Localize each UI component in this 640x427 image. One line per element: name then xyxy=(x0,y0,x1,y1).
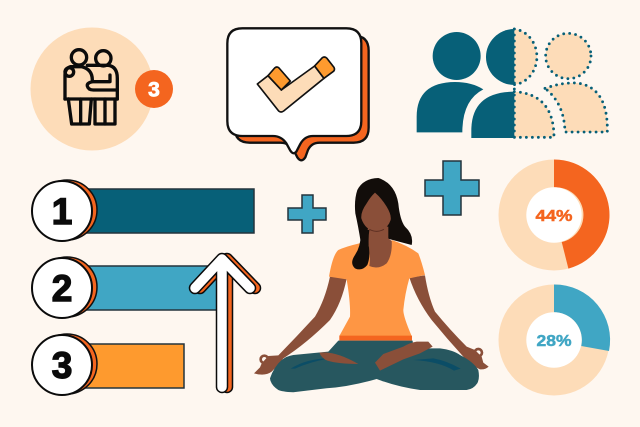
figure: woman meditating xyxy=(254,178,489,392)
neck and chest xyxy=(363,227,393,270)
hair front strand xyxy=(352,230,369,269)
shirt hem xyxy=(339,336,412,341)
badge: number 3 xyxy=(135,70,173,108)
chart: donut 28% xyxy=(498,284,610,396)
foot left xyxy=(319,352,358,364)
arm left xyxy=(254,277,347,375)
jaw shadow xyxy=(369,229,384,231)
icon: large plus xyxy=(425,161,479,215)
face xyxy=(361,193,391,232)
icon: checkmark xyxy=(257,57,334,112)
bar 3 xyxy=(32,334,184,395)
bar 2 xyxy=(32,257,222,318)
bar 1 xyxy=(32,180,254,241)
panel: couple icon with count badge xyxy=(30,28,173,150)
half filled person xyxy=(471,29,554,138)
chart: donut 28%: 28% xyxy=(536,333,572,350)
peach circle xyxy=(30,28,154,150)
shirt xyxy=(329,240,425,336)
arrow: upward xyxy=(195,259,255,387)
bar 3: 3 xyxy=(52,345,72,386)
chart: donut 44% xyxy=(498,160,610,270)
bubble shadow xyxy=(235,36,369,160)
chart: donut 44%: 44% xyxy=(536,208,573,225)
panel: people proportion icon xyxy=(417,29,607,138)
panel: speech bubble with checkmark xyxy=(227,28,369,160)
icon: embracing couple xyxy=(65,50,117,124)
finger ring right xyxy=(475,349,482,356)
hair back xyxy=(352,178,412,269)
bar 2: 2 xyxy=(52,268,72,309)
finger ring left xyxy=(261,356,268,363)
icon: small plus xyxy=(288,195,326,233)
foot right xyxy=(375,342,433,371)
legs xyxy=(270,341,479,392)
badge: number 3: 3 xyxy=(148,78,160,102)
bar 1: 1 xyxy=(52,191,72,232)
panel: ranked bars xyxy=(32,180,254,395)
knee creases xyxy=(291,358,330,369)
dotted outline person xyxy=(545,33,607,132)
solid person xyxy=(417,32,483,132)
bubble xyxy=(227,28,361,153)
arm right xyxy=(409,275,489,369)
